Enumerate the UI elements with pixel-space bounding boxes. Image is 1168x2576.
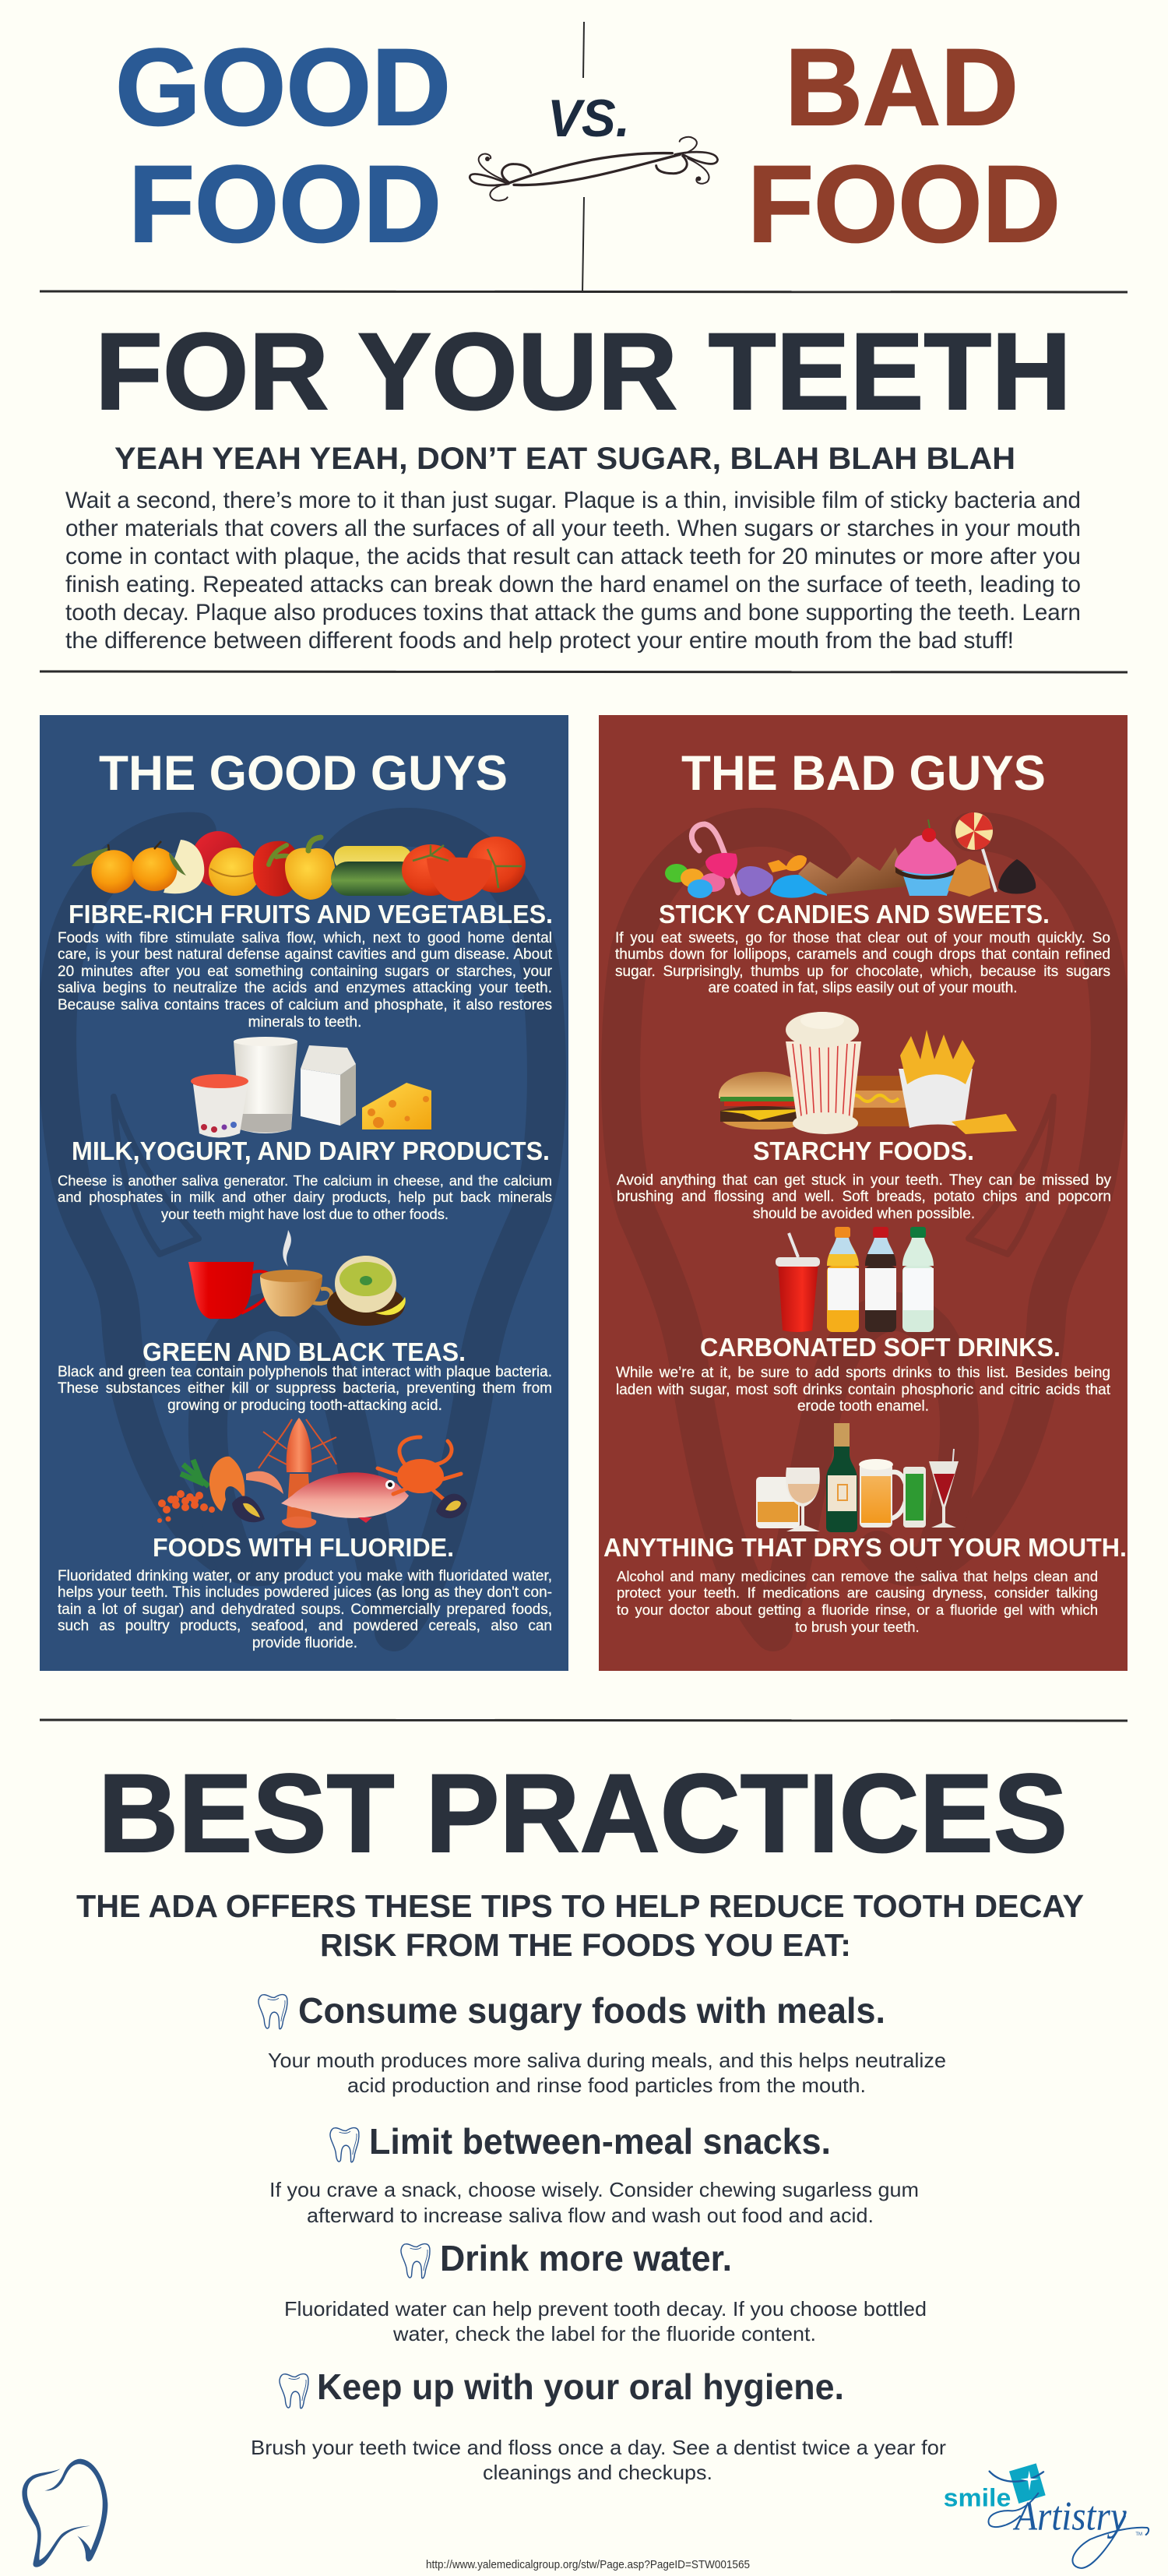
text: sticky candies: sugar. Surprisingly, thumbs up for chocolate, which, because its sugars — [615, 964, 1110, 980]
title: good food: GOOD — [115, 26, 451, 148]
divider under title — [40, 291, 1128, 292]
vs label: VS. — [547, 89, 630, 148]
heading: anything that drys: ANYTHING THAT DRYS OUT YOUR MOUTH. — [603, 1533, 1127, 1562]
divider above best practices — [40, 1720, 1128, 1721]
text: milk: your teeth might have lost due to other foods. — [161, 1206, 449, 1222]
text: fluoride: Fluoridated drinking water, or any product you make with fluoridated water, — [58, 1568, 552, 1584]
icon: tooth — [330, 2128, 359, 2162]
heading: sticky candies: STICKY CANDIES AND SWEETS. — [659, 900, 1050, 929]
heading: foods with fluoride: FOODS WITH FLUORIDE. — [153, 1533, 454, 1562]
tip 2: afterward to increase saliva flow and wash out food and acid. — [307, 2204, 874, 2227]
illustration: alcohol — [756, 1423, 959, 1532]
illustration: fruits and vegetables — [72, 831, 526, 901]
heading: green and black teas: GREEN AND BLACK TEAS. — [142, 1337, 466, 1366]
title: bad food: FOOD — [748, 143, 1061, 265]
tip 4: cleanings and checkups. — [483, 2461, 712, 2484]
text: milk: Cheese is another saliva generator. The calcium in cheese, and the calcium — [58, 1172, 552, 1189]
tip 3: Drink more water. — [440, 2238, 732, 2278]
subheading: ada tips: RISK FROM THE FOODS YOU EAT: — [320, 1927, 851, 1963]
divider under intro — [40, 671, 1128, 672]
text: anything that drys: to brush your teeth. — [795, 1619, 920, 1635]
text: soft drinks: erode tooth enamel. — [797, 1398, 929, 1415]
text: fluoride: helps your teeth. This includes powdered juices (as long as they don't con- — [58, 1584, 552, 1601]
text: starchy foods: Avoid anything that can get stuck in your teeth. They can be missed by — [617, 1172, 1111, 1189]
title: good food: FOOD — [128, 143, 442, 265]
heading: fibre-rich: FIBRE-RICH FRUITS AND VEGETABLES. — [69, 900, 553, 929]
text: sticky candies: thumbs down for lollipops, caramels and cough drops that contain refined — [615, 946, 1110, 963]
subheading: ada tips: THE ADA OFFERS THESE TIPS TO HELP REDUCE TOOTH DECAY — [76, 1888, 1084, 1924]
text: anything that drys — [617, 1568, 1098, 1636]
illustration: teas — [188, 1230, 406, 1326]
logo: smile artistry — [944, 2463, 1149, 2568]
text: milk — [58, 1172, 552, 1223]
ornamental flourish — [470, 137, 718, 201]
text: soft drinks: laden with sugar, most soft drinks contain phosphoric and citric acids that — [616, 1382, 1110, 1398]
illustration: seafood — [157, 1418, 467, 1528]
panel: the good guys — [40, 715, 568, 1671]
illustration: dairy — [191, 1037, 431, 1137]
icon: tooth — [259, 1995, 287, 2029]
text: fluoride: tain a lot of sugar) and dehydrated soups. Commercially prepared foods, — [58, 1602, 552, 1618]
heading: carbonated soft drinks: CARBONATED SOFT DRINKS. — [700, 1333, 1061, 1362]
tip 1: Your mouth produces more saliva during meals, and this helps neutralize — [268, 2049, 946, 2072]
intro paragraph: the difference between different foods and help protect your entire mouth from the bad stuff! — [65, 628, 1014, 654]
text: sticky candies: are coated in fat, slips easily out of your mouth. — [708, 980, 1018, 996]
text: sticky candies: If you eat sweets, go for those that clear out of your mouth quickly. So — [615, 930, 1110, 946]
text: fibre-rich: minerals to teeth. — [248, 1014, 361, 1031]
intro paragraph: other materials that covers all the surfaces of all your teeth. When sugars or starches in your mouth — [65, 516, 1081, 541]
watermark tooth — [57, 827, 547, 1632]
panel: the bad guys — [599, 715, 1128, 1671]
text: starchy foods — [617, 1172, 1112, 1222]
watermark tooth — [621, 827, 1110, 1632]
text: teas: Black and green tea contain polyphenols that interact with plaque bacteria. — [58, 1364, 552, 1380]
icon: large tooth logo — [22, 2459, 107, 2567]
text: milk: and phosphates in milk and other dairy products, help put back minerals — [58, 1189, 552, 1205]
tip 1: acid production and rinse food particles from the mouth. — [347, 2074, 866, 2097]
illustration: soft drinks — [776, 1227, 934, 1332]
tip 4 — [251, 2366, 946, 2484]
text: teas: These substances either kill or suppress bacteria, preventing them from — [58, 1380, 552, 1397]
tip 4: Brush your teeth twice and floss once a day. See a dentist twice a year for — [251, 2436, 946, 2459]
text: fibre-rich — [58, 930, 553, 1031]
icon: tooth — [280, 2374, 308, 2409]
subheading: ada tips — [76, 1888, 1084, 1963]
tip 4: Keep up with your oral hygiene. — [317, 2366, 844, 2407]
intro paragraph: tooth decay. Plaque also produces toxins that attack the gums and bone supporting the teeth. Learn — [65, 600, 1081, 625]
heading: best practices: BEST PRACTICES — [98, 1752, 1068, 1876]
text: fluoride: such as poultry products, seafood, and powdered cereals, also can — [58, 1618, 552, 1634]
text: teas — [58, 1364, 552, 1414]
tip 1: Consume sugary foods with meals. — [298, 1990, 885, 2031]
text: fibre-rich: saliva begins to neutralize the acids and enzymes attacking your teeth. — [58, 980, 552, 996]
text: fibre-rich: care, is your best natural defense against cavities and gum disease. About — [58, 946, 552, 963]
heading: starchy foods: STARCHY FOODS. — [753, 1136, 974, 1165]
text: sticky candies — [615, 930, 1110, 996]
text: soft drinks: While we’re at it, be sure to add sports drinks to this list. Besides being — [616, 1365, 1110, 1381]
tip 3: water, check the label for the fluoride content. — [392, 2322, 816, 2345]
heading: the bad guys: THE BAD GUYS — [681, 746, 1046, 801]
subheading: YEAH YEAH YEAH, DON’T EAT SUGAR, BLAH BLAH BLAH — [114, 442, 1015, 476]
illustration: starchy foods — [719, 1012, 1017, 1134]
text: soft drinks — [616, 1365, 1110, 1415]
tip 3 — [284, 2238, 927, 2345]
heading: milk: MILK,YOGURT, AND DAIRY PRODUCTS. — [72, 1136, 550, 1165]
text: fluoride: provide fluoride. — [252, 1635, 357, 1651]
center divider lines — [582, 22, 584, 293]
tip 1 — [259, 1990, 946, 2097]
heading: for your teeth: FOR YOUR TEETH — [95, 310, 1071, 432]
intro paragraph: Wait a second, there’s more to it than just sugar. Plaque is a thin, invisible film of sticky bacteria and — [65, 488, 1081, 513]
illustration: candies — [665, 812, 1036, 898]
logo: smile artistry: smile — [944, 2483, 1011, 2511]
source url: http://www.yalemedicalgroup.org/stw/Page.asp?PageID=STW001565 — [426, 2558, 750, 2571]
text: fibre-rich: Because saliva contains traces of calcium and phosphate, it also restores — [58, 997, 552, 1013]
tip 3: Fluoridated water can help prevent tooth decay. If you choose bottled — [284, 2297, 927, 2321]
icon: tooth — [401, 2244, 430, 2278]
text: teas: growing or producing tooth-attacking acid. — [167, 1397, 442, 1414]
intro paragraph: come in contact with plaque, the acids that result can attack teeth for 20 minutes or more after you — [65, 544, 1081, 569]
title: good food — [115, 26, 451, 265]
tip 2: If you crave a snack, choose wisely. Consider chewing sugarless gum — [269, 2178, 919, 2201]
intro paragraph: finish eating. Repeated attacks can break down the hard enamel on the surface of teeth, leading to — [65, 572, 1081, 597]
title: bad food — [748, 26, 1061, 265]
text: fibre-rich: Foods with fibre stimulate saliva flow, which, next to good home dental — [58, 930, 552, 946]
tip 2: Limit between-meal snacks. — [369, 2121, 831, 2162]
text: starchy foods: should be avoided when possible. — [753, 1206, 975, 1222]
text: anything that drys: protect your teeth. If medications are causing dryness, consider talking — [617, 1584, 1098, 1601]
text: anything that drys: to your doctor about getting a fluoride rinse, or a fluoride gel with which — [617, 1602, 1098, 1618]
title: bad food: BAD — [785, 26, 1018, 148]
text: fibre-rich: 20 minutes after you eat something containing sugars or starches, your — [58, 964, 552, 980]
text: anything that drys: Alcohol and many medicines can remove the saliva that helps clean and — [617, 1568, 1098, 1584]
text: fluoride — [58, 1568, 552, 1651]
heading: the good guys: THE GOOD GUYS — [99, 746, 508, 801]
logo: smile artistry: TM — [1135, 2532, 1142, 2537]
text: starchy foods: brushing and flossing and well. Soft breads, potato chips and popcorn — [617, 1189, 1111, 1205]
logo: smile artistry: Artistry — [1013, 2492, 1127, 2539]
intro paragraph — [65, 488, 1081, 654]
tip 2 — [269, 2121, 919, 2227]
